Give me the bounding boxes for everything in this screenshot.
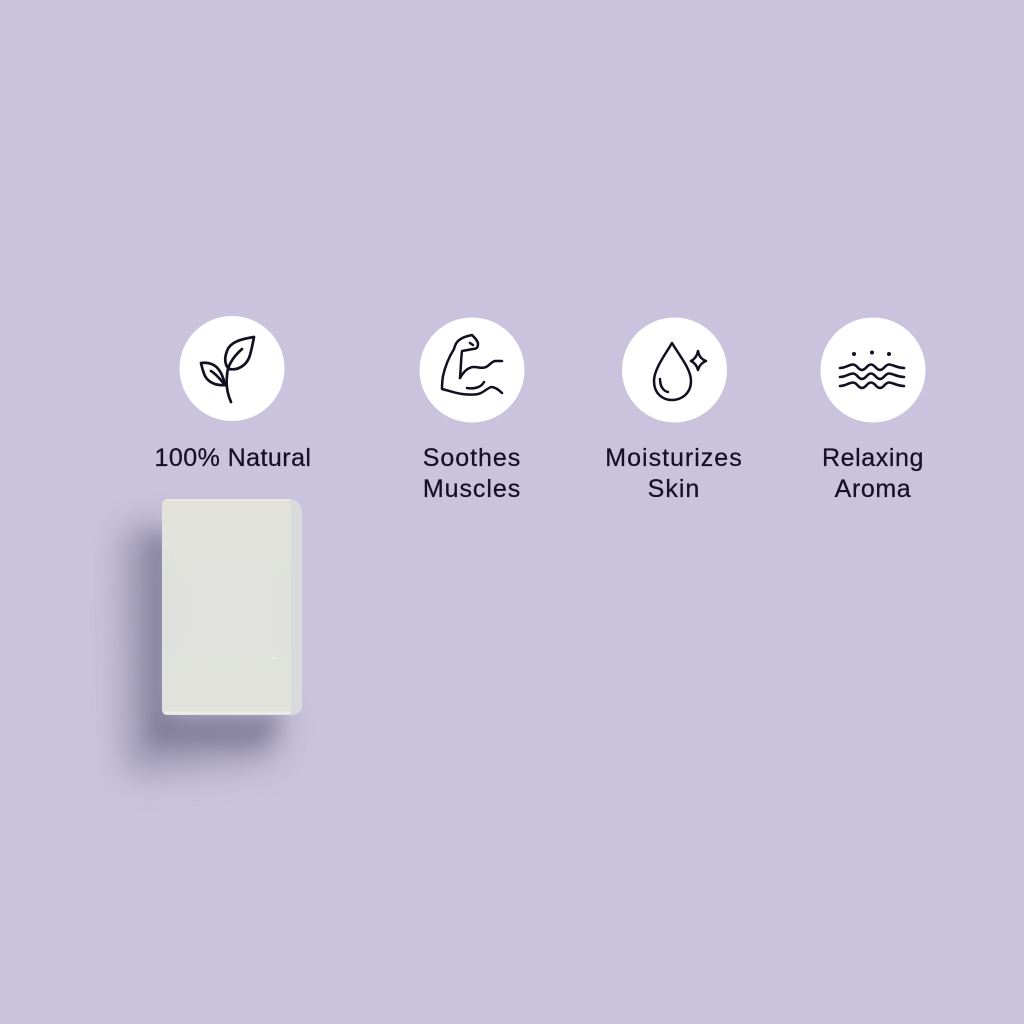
icon: water drop and sparkle [622, 318, 727, 422]
label: Moisturizes [605, 444, 743, 472]
icon: leaf [180, 316, 284, 421]
benefit: Relaxing Aroma [820, 318, 926, 503]
label: Skin [648, 475, 700, 503]
benefit: 100% Natural [155, 316, 311, 472]
icon: flexed arm [420, 318, 524, 422]
label: Soothes [423, 444, 521, 472]
label: Muscles [423, 475, 521, 503]
label [822, 444, 924, 503]
label: 100% Natural [155, 444, 311, 472]
label [423, 444, 521, 503]
icon: aroma waves [820, 318, 926, 422]
benefit: Moisturizes Skin [605, 318, 743, 503]
label: Aroma [835, 475, 911, 503]
benefit: Soothes Muscles [420, 318, 524, 503]
label [605, 444, 743, 503]
label: Relaxing [822, 444, 924, 472]
